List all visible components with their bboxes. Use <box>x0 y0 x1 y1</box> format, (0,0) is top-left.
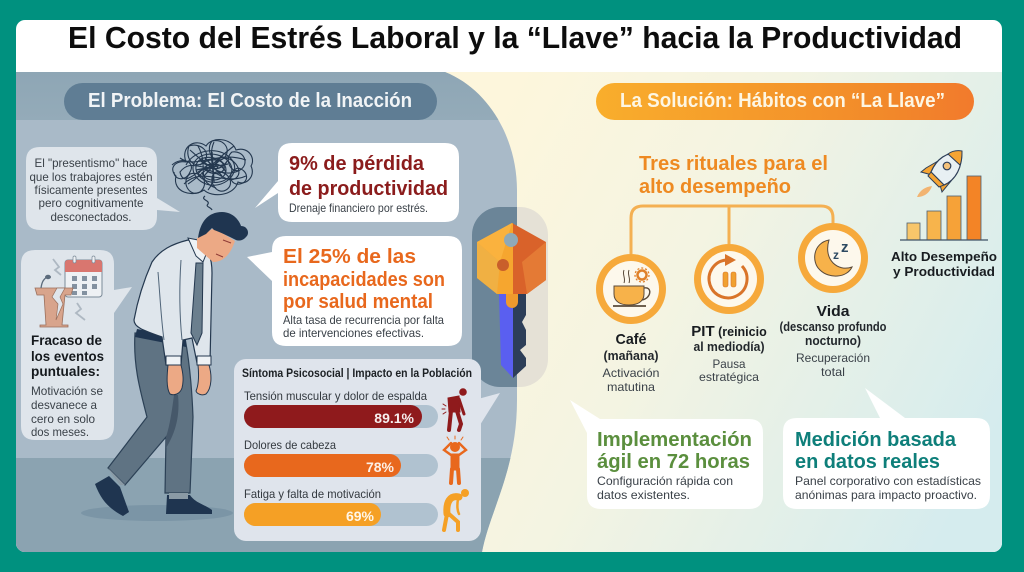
callout: presentismo: El "presentismo" hace <box>34 156 148 170</box>
callout: implementacion: datos existentes. <box>597 488 690 502</box>
callout: medicion: en datos reales <box>795 451 940 473</box>
callout: perdida de productividad <box>255 143 459 222</box>
callout: medicion: Panel corporativo con estadísticas <box>795 474 981 488</box>
panel: symptoms chart: Síntoma Psicosocial | Impacto en la Población <box>242 366 472 380</box>
callout: presentismo <box>26 147 180 230</box>
callout: fracaso de los eventos: puntuales: <box>31 363 100 379</box>
ritual: vida: total <box>821 365 845 379</box>
ritual: vida <box>780 223 887 379</box>
icon: rocket and growth chart <box>900 151 988 240</box>
bar: dolores de cabeza: Dolores de cabeza <box>244 438 336 452</box>
label: alto desempeno: Alto Desempeño <box>891 250 997 264</box>
callout: presentismo: que los trabajores estén <box>30 170 152 184</box>
bar: fatiga: Fatiga y falta de motivación <box>244 487 381 501</box>
ritual: vida: Vida <box>816 303 850 320</box>
title: El Costo del Estrés Laboral y la “Llave” hacia la Productividad <box>68 20 962 55</box>
callout: implementacion: Configuración rápida con <box>597 474 733 488</box>
callout: perdida de productividad: Drenaje financiero por estrés. <box>289 201 428 215</box>
callout: perdida de productividad: de productividad <box>289 178 448 200</box>
callout: presentismo: pero cognitivamente <box>38 196 144 210</box>
ritual: cafe: Activación <box>602 366 660 380</box>
callout: fracaso de los eventos: desvanece a <box>31 398 97 412</box>
heading: el problema <box>64 83 437 120</box>
callout: fracaso de los eventos: cero en solo <box>31 412 95 426</box>
ritual: pit: al mediodía) <box>694 340 764 354</box>
ritual: pit <box>691 244 767 384</box>
figure: tired worker <box>81 212 248 521</box>
icon: tangled thoughts <box>172 140 253 210</box>
ritual: vida: nocturno) <box>805 334 861 348</box>
heading: la solucion: La Solución: Hábitos con “La Llave” <box>620 90 945 112</box>
bar: tension muscular: 89.1% <box>374 410 415 426</box>
callout: medicion <box>783 388 990 509</box>
ritual: pit: Pausa <box>712 357 746 371</box>
icon: key <box>472 207 548 387</box>
heading: la solucion <box>596 83 974 120</box>
callout: implementacion: ágil en 72 horas <box>597 451 750 473</box>
icon: moon <box>798 223 868 293</box>
label: alto desempeno: y Productividad <box>893 265 995 279</box>
callout: incapacidades: Alta tasa de recurrencia por falta <box>283 313 444 327</box>
callout: incapacidades: de intervenciones efectivas. <box>283 326 424 340</box>
callout: presentismo: desconectados. <box>50 210 132 224</box>
callout: incapacidades: El 25% de las <box>283 246 416 268</box>
callout: fracaso de los eventos: los eventos <box>31 348 104 364</box>
icon: cracked podium <box>35 259 85 327</box>
icon: pause cycle <box>694 244 764 314</box>
callout: incapacidades: incapacidades son <box>283 269 445 291</box>
ritual: pit: estratégica <box>699 370 759 384</box>
heading: tres rituales <box>639 153 828 198</box>
bar: tension muscular <box>244 389 438 428</box>
connector <box>631 206 833 254</box>
icon: headache <box>444 436 466 483</box>
heading: tres rituales: alto desempeño <box>639 176 791 198</box>
ritual: cafe <box>596 254 666 394</box>
callout: fracaso de los eventos: Motivación se <box>31 384 103 398</box>
callout: fracaso de los eventos: Fracaso de <box>31 332 102 348</box>
ritual: cafe: (mañana) <box>604 349 658 363</box>
bar: fatiga <box>244 487 438 526</box>
bar: dolores de cabeza: 78% <box>366 459 395 475</box>
ritual: cafe: matutina <box>607 380 655 394</box>
callout: incapacidades <box>247 236 462 346</box>
heading: el problema: El Problema: El Costo de la Inacción <box>88 90 412 112</box>
label: alto desempeno <box>891 250 997 279</box>
ritual: pit: PIT (reinicio <box>691 323 767 340</box>
icon: coffee <box>596 254 666 324</box>
callout: presentismo: físicamente presentes <box>34 183 148 197</box>
ritual: vida: Recuperación <box>796 351 870 365</box>
icon: moon: z <box>841 239 848 256</box>
panel: symptoms chart <box>234 359 500 541</box>
bar: fatiga: 69% <box>346 508 375 524</box>
icon: fatigue <box>444 489 469 530</box>
bar: dolores de cabeza <box>244 438 438 477</box>
ritual: cafe: Café <box>616 331 646 348</box>
bar: tension muscular: Tensión muscular y dolor de espalda <box>244 389 427 403</box>
callout: medicion: Medición basada <box>795 429 957 451</box>
callout: implementacion <box>570 400 763 509</box>
icon: calendar <box>65 256 102 297</box>
icon: moon: z <box>833 248 839 262</box>
callout: fracaso de los eventos: dos meses. <box>31 425 89 439</box>
callout: medicion: anónimas para impacto proactivo. <box>795 488 977 502</box>
ritual: vida: (descanso profundo <box>780 320 887 334</box>
callout: incapacidades: por salud mental <box>283 291 433 313</box>
icon: back pain <box>442 388 467 430</box>
callout: perdida de productividad: 9% de pérdida <box>289 153 425 175</box>
callout: implementacion: Implementación <box>597 429 752 451</box>
heading: tres rituales: Tres rituales para el <box>639 153 828 175</box>
callout: fracaso de los eventos <box>21 250 132 440</box>
